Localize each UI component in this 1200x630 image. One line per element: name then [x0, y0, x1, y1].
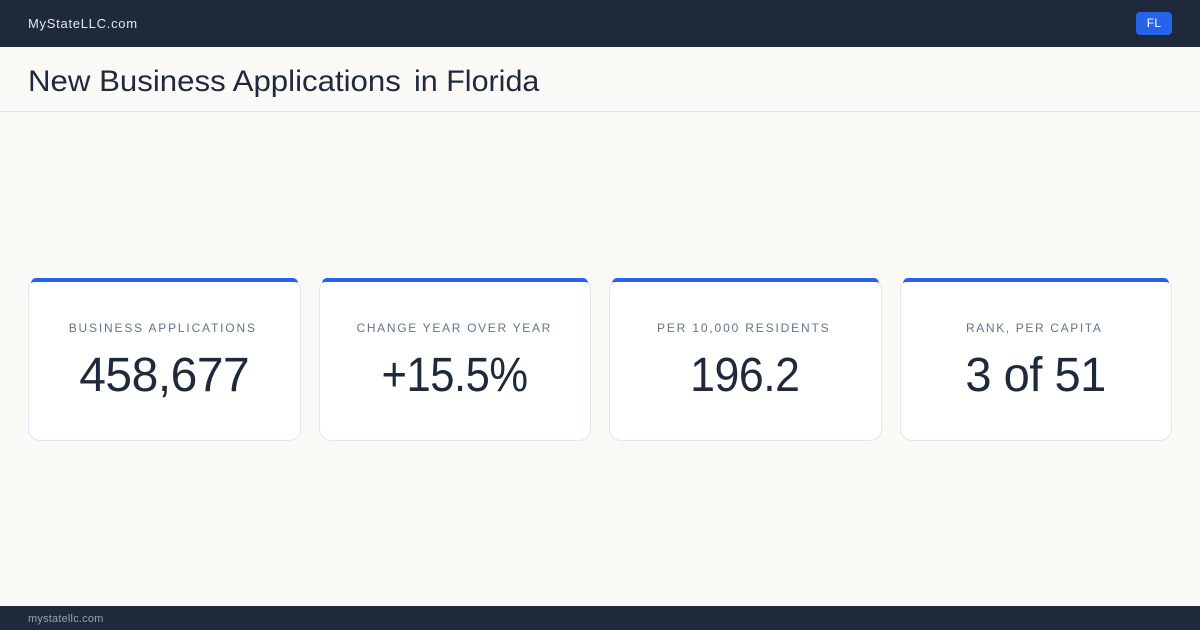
card: per 10,000 residents: 196.2	[691, 349, 800, 402]
state badge: FL	[1147, 16, 1161, 30]
top header bar	[0, 0, 1200, 47]
title band	[0, 47, 1200, 112]
state badge	[1136, 12, 1172, 35]
card: rank per capita	[900, 278, 1172, 441]
card: rank per capita: 3 of 51	[966, 349, 1106, 402]
page title: New Business Applications	[28, 65, 401, 98]
card: business applications	[28, 278, 300, 441]
card: business applications: 458,677	[79, 349, 249, 402]
card: change year over year	[318, 278, 591, 441]
card: business applications: BUSINESS APPLICATIONS	[69, 321, 257, 335]
card: per 10,000 residents	[609, 278, 882, 441]
card: rank per capita: RANK, PER CAPITA	[966, 321, 1103, 335]
brand name: MyStateLLC.com	[28, 16, 138, 31]
card: per 10,000 residents: PER 10,000 RESIDENTS	[657, 321, 831, 335]
card: change year over year: +15.5%	[382, 349, 528, 402]
stat cards row	[28, 278, 1172, 441]
footer url: mystatellc.com	[28, 613, 104, 625]
page title: in Florida	[414, 65, 539, 98]
card: change year over year: CHANGE YEAR OVER YEAR	[356, 321, 552, 335]
footer bar	[0, 606, 1200, 630]
